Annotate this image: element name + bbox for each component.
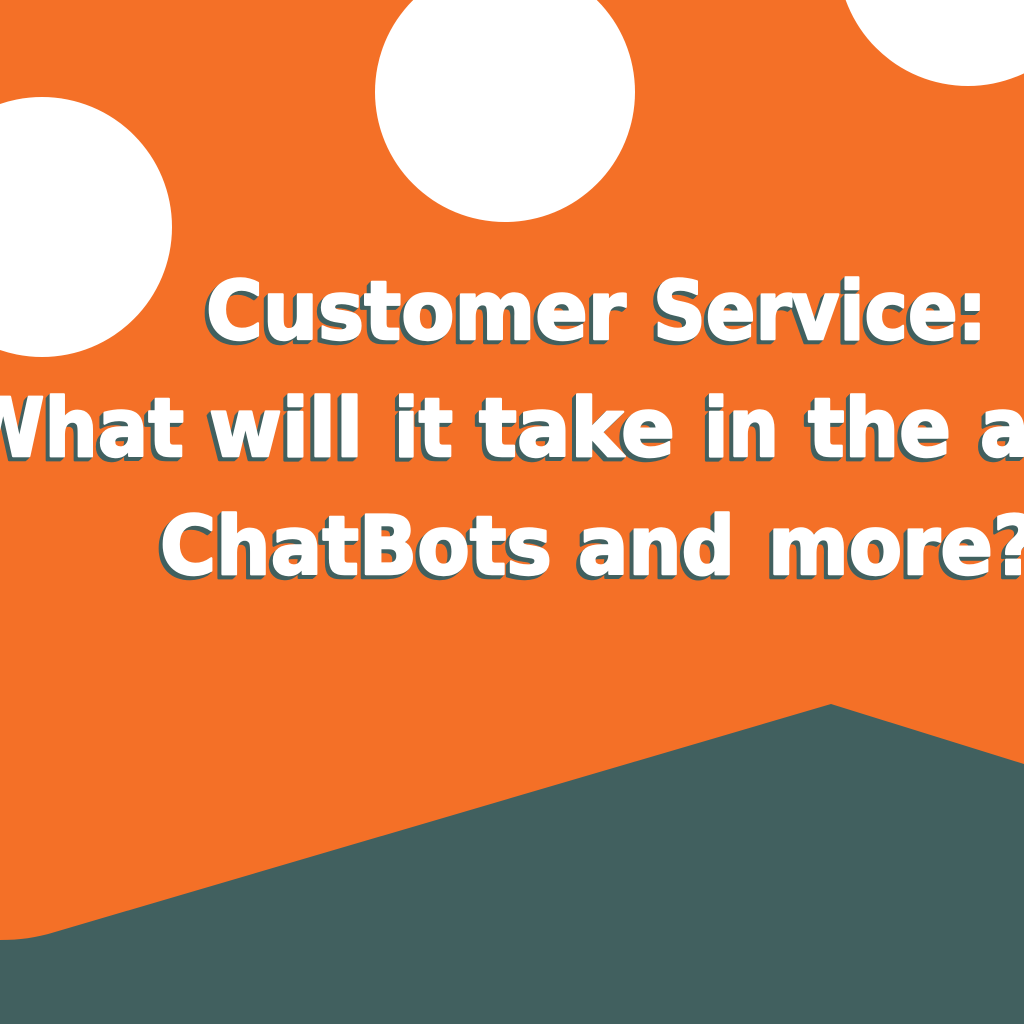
title line 2: it (394, 382, 453, 476)
title line 3: and (578, 500, 735, 594)
title line 2: in (704, 382, 779, 476)
title line 2: the (808, 382, 951, 476)
circle: top centre (375, 0, 635, 222)
title line 3: ChatBots (160, 500, 552, 594)
title line 1 (206, 265, 987, 359)
circle: left (0, 97, 172, 357)
ground shape: dark teal (0, 704, 1024, 1024)
title line 2: take (479, 382, 675, 476)
title line 1: Customer (206, 265, 626, 359)
title line 2: will (209, 382, 363, 476)
title line 1: Service: (653, 265, 987, 359)
title (0, 265, 1024, 594)
title line 2 (0, 382, 1024, 476)
circle: top right (838, 0, 1024, 86)
title line 3 (160, 500, 1024, 594)
